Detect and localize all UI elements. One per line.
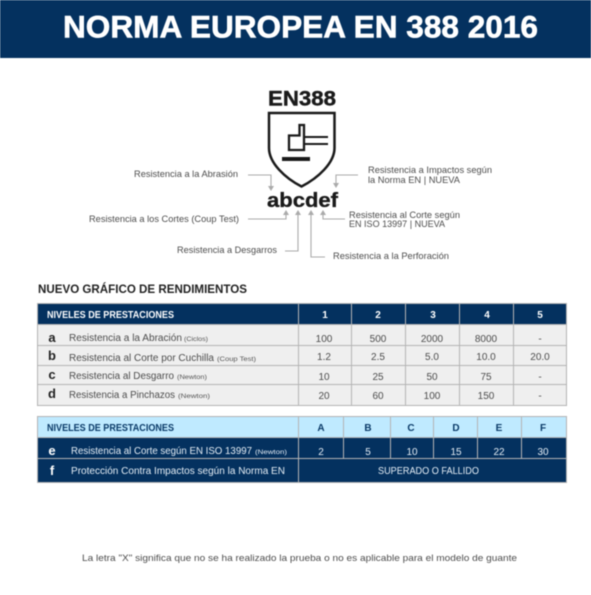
table header row: 3 — [430, 310, 436, 321]
row d: puncture: 150 — [478, 391, 495, 402]
table: performance levels A to F — [37, 416, 567, 483]
table header row: 1 — [322, 310, 328, 321]
heading: performance chart: NUEVO GRÁFICO DE RENDIMIENTOS — [38, 281, 247, 296]
row c: tear — [38, 366, 566, 384]
second table header row: NIVELES DE PRESTACIONES — [47, 423, 174, 434]
row b: blade cut: 1.2 — [317, 352, 331, 363]
row e: ISO cut: 22 — [493, 447, 505, 458]
row a: abrasion: 2000 — [421, 334, 444, 345]
row e: ISO cut: 30 — [537, 447, 549, 458]
row d: puncture: 60 — [372, 391, 384, 402]
arrow: ISO cut to e — [320, 210, 345, 219]
row c: tear: c — [48, 367, 56, 382]
row e: ISO cut: 5 — [365, 447, 371, 458]
row a: abrasion — [38, 325, 566, 345]
row b: blade cut: (Coup Test) — [217, 357, 256, 363]
icon: EN388 shield with hammer pictogram — [267, 88, 338, 212]
row f: impact protection: SUPERADO O FALLIDO — [378, 466, 479, 477]
arrow: perforation to d — [308, 210, 325, 257]
second table header row: A — [317, 423, 325, 434]
footnote: La letra "X" significa que no se ha realizado la prueba o no es aplicable para el modelo de guante — [82, 553, 517, 564]
second table header row: B — [364, 423, 372, 434]
table header row: 4 — [484, 310, 490, 321]
label: cuts: Resistencia a los Cortes (Coup Test) — [89, 214, 239, 225]
second table header row — [38, 417, 566, 437]
table header row: 5 — [537, 310, 543, 321]
row f: impact protection: f — [50, 463, 55, 478]
table header row — [38, 304, 566, 324]
label: impacts — [368, 165, 492, 186]
label: ISO cut resistance — [349, 210, 460, 230]
row b: blade cut: 10.0 — [476, 352, 496, 363]
row d: puncture: - — [538, 391, 542, 402]
row e: ISO cut: (Newton) — [255, 450, 287, 456]
row c: tear: 75 — [480, 372, 492, 383]
icon: EN388 shield with hammer pictogram: EN388 — [268, 88, 336, 110]
row c: tear: 10 — [318, 372, 330, 383]
row e: ISO cut: Resistencia al Corte según EN ISO 13997 — [71, 446, 252, 457]
row c: tear: 25 — [372, 372, 384, 383]
row b: blade cut: b — [48, 348, 56, 363]
row d: puncture: 20 — [318, 391, 330, 402]
row f: impact protection — [38, 459, 566, 482]
icon: EN388 shield with hammer pictogram: abcdef — [267, 190, 338, 212]
row b: blade cut: Resistencia al Corte por Cuchilla — [69, 353, 214, 364]
row a: abrasion: a — [48, 330, 56, 345]
row b: blade cut: 2.5 — [371, 352, 385, 363]
label: ISO cut resistance: EN ISO 13997 | NUEVA — [349, 219, 446, 230]
label: impacts: la Norma EN | NUEVA — [368, 175, 461, 186]
row e: ISO cut — [38, 438, 566, 458]
row d: puncture: Resistencia a Pinchazos — [69, 390, 175, 401]
row d: puncture — [38, 385, 566, 405]
row e: ISO cut: e — [48, 443, 56, 458]
arrow: abrasion to a — [248, 175, 274, 191]
second table header row: E — [496, 423, 503, 434]
second table header row: F — [540, 423, 546, 434]
label: perforation: Resistencia a la Perforación — [333, 251, 449, 262]
label: tears: Resistencia a Desgarros — [177, 245, 277, 256]
row d: puncture: d — [48, 386, 56, 401]
table: performance levels 1 to 5 — [37, 303, 567, 406]
table header row: 2 — [375, 310, 381, 321]
second table header row: D — [452, 423, 460, 434]
row e: ISO cut: 2 — [318, 447, 324, 458]
row c: tear: (Newton) — [177, 375, 207, 381]
label: abrasion: Resistencia a la Abrasión — [134, 169, 238, 180]
row a: abrasion: 500 — [370, 334, 387, 345]
label: impacts: Resistencia a Impactos según — [368, 165, 492, 176]
row d: puncture: (Newton) — [178, 394, 210, 400]
row a: abrasion: 8000 — [475, 334, 498, 345]
row c: tear: Resistencia al Desgarro — [69, 371, 174, 382]
arrow: impacts to f — [333, 175, 358, 188]
row b: blade cut: 20.0 — [530, 352, 550, 363]
arrow: tears to c — [285, 210, 301, 251]
table header row: NIVELES DE PRESTACIONES — [47, 310, 174, 321]
row f: impact protection: Protección Contra Impactos según la Norma EN — [71, 466, 285, 477]
row a: abrasion: Resistencia a la Abración — [69, 333, 182, 344]
row e: ISO cut: 15 — [450, 447, 462, 458]
row a: abrasion: 100 — [316, 334, 333, 345]
title banner: NORMA EUROPEA EN 388 2016 — [63, 8, 538, 44]
label: ISO cut resistance: Resistencia al Corte según — [349, 210, 460, 221]
title banner — [0, 0, 591, 58]
row b: blade cut: 5.0 — [425, 352, 439, 363]
arrow: cuts to b — [248, 210, 289, 219]
row a: abrasion: - — [538, 334, 542, 345]
row a: abrasion: (Ciclos) — [184, 337, 208, 343]
row d: puncture: 100 — [424, 391, 441, 402]
row c: tear: - — [538, 372, 542, 383]
row e: ISO cut: 10 — [406, 447, 418, 458]
row c: tear: 50 — [426, 372, 438, 383]
second table header row: C — [407, 423, 415, 434]
row b: blade cut — [38, 346, 566, 365]
